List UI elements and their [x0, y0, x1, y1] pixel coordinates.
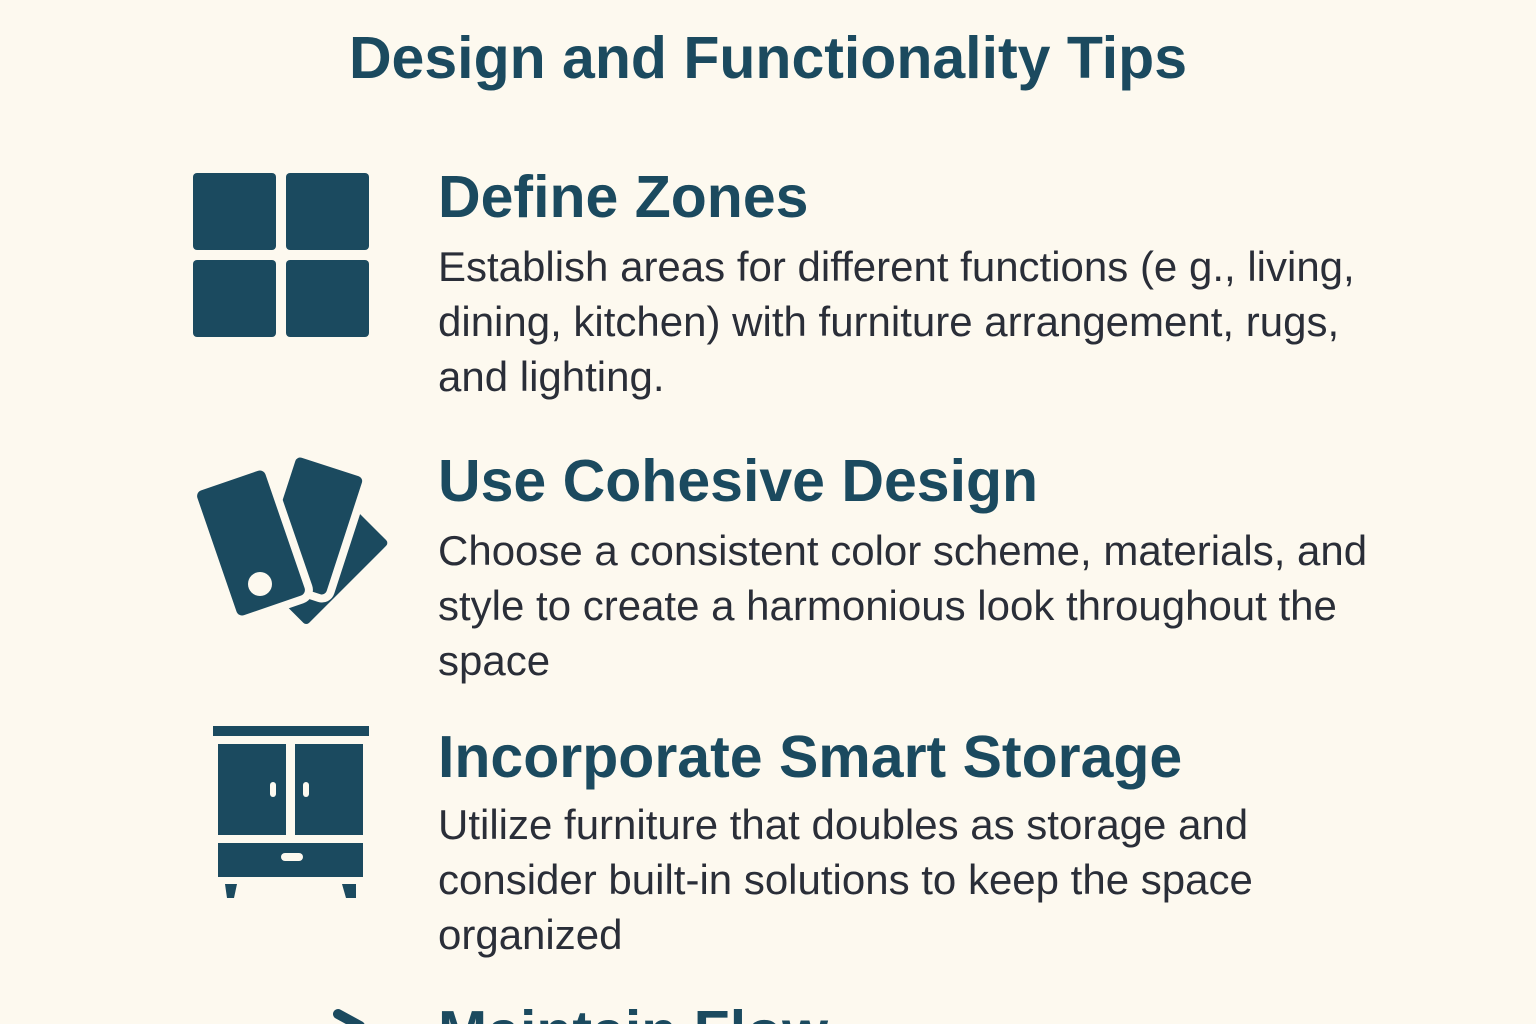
- heading: cohesive design: Use Cohesive Design: [438, 448, 1038, 514]
- heading: define zones: Define Zones: [438, 164, 808, 230]
- heading: smart storage: Incorporate Smart Storage: [438, 724, 1182, 790]
- text: smart storage: Utilize furniture that doubles as storage and: [438, 801, 1248, 848]
- title: Design and Functionality Tips: [349, 25, 1187, 91]
- text: cohesive design: space: [438, 637, 550, 684]
- text: cohesive design: style to create a harmonious look throughout the: [438, 582, 1337, 629]
- text: smart storage: consider built-in solutions to keep the space: [438, 856, 1253, 903]
- text: define zones: dining, kitchen) with furniture arrangement, rugs,: [438, 298, 1339, 345]
- text: cohesive design: [438, 527, 1367, 684]
- icon: swatches: [197, 458, 388, 624]
- text: smart storage: organized: [438, 911, 622, 958]
- text: smart storage: [438, 801, 1253, 958]
- text: define zones: [438, 243, 1355, 400]
- icon: flow arrow: [333, 1009, 364, 1024]
- text: cohesive design: Choose a consistent color scheme, materials, and: [438, 527, 1367, 574]
- icon: zones grid: [193, 173, 369, 337]
- text: define zones: Establish areas for different functions (e g., living,: [438, 243, 1355, 290]
- icon: cabinet: [213, 726, 369, 898]
- text: define zones: and lighting.: [438, 353, 665, 400]
